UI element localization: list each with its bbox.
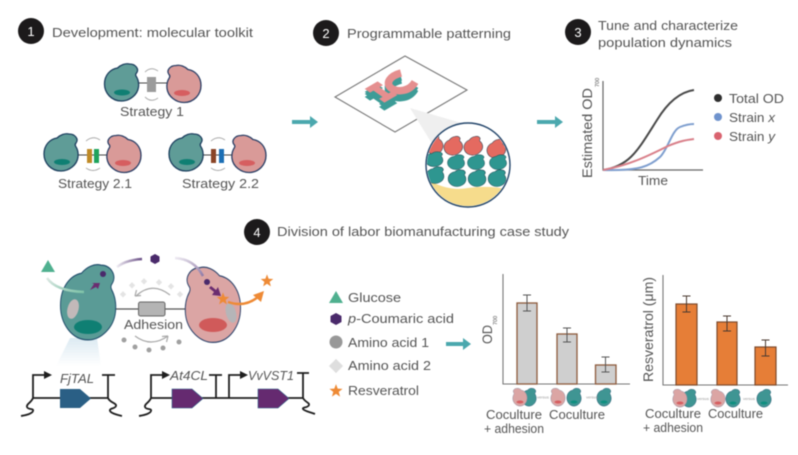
resveratrol axis label: Resveratrol (μm): [640, 277, 656, 382]
heading 1: 1: [27, 24, 35, 39]
line chart: Time: [638, 174, 668, 188]
strategy 1 diagram: [104, 64, 201, 119]
arrow: legend to charts: [446, 338, 471, 350]
p-coumaric acid icon: [150, 254, 160, 264]
strategy 2.2 diagram: Strategy 2.2: [182, 177, 259, 191]
strategy 2.2 diagram: [169, 134, 266, 191]
heading 3: 3: [574, 25, 582, 40]
genetic construct: At4CL and VvVST1: VvVST1: [248, 369, 294, 383]
panel 1: molecular toolkit: [18, 18, 266, 191]
patterned plate: [335, 56, 467, 132]
resveratrol condition icons: [673, 389, 771, 407]
resveratrol condition labels: Coculture: [645, 407, 701, 421]
genetic construct: At4CL and VvVST1: [139, 369, 315, 416]
resveratrol condition icons: versus: [697, 396, 709, 401]
export arc: [117, 259, 142, 267]
OD condition icons: versus: [586, 394, 598, 400]
heading 1: [18, 18, 254, 44]
chart legend: [714, 92, 784, 144]
OD axis label: 700: [493, 316, 499, 325]
OD condition labels: [484, 408, 605, 436]
expression beam: [56, 338, 101, 366]
bar chart: resveratrol: [640, 275, 788, 435]
resveratrol export arrow: [217, 274, 273, 304]
heading 3: Tune and characterize: [598, 19, 738, 33]
heading 2: [313, 20, 511, 46]
glucose uptake arrow: [47, 278, 84, 292]
resveratrol condition labels: Coculture: [708, 407, 763, 421]
strategy 2.1 diagram: Strategy 2.1: [58, 177, 132, 191]
genetic construct: FjTAL: [21, 371, 122, 416]
pink cell: [185, 267, 241, 342]
OD condition labels: Coculture: [549, 408, 605, 422]
heading 3: population dynamics: [598, 36, 732, 50]
strategy 2.1 diagram: [44, 134, 141, 191]
import arc: [175, 258, 203, 276]
OD bars: [517, 303, 616, 384]
genetic construct: FjTAL: FjTAL: [60, 372, 94, 386]
chart legend: Strain y: [729, 130, 776, 144]
magnified lens: [422, 123, 511, 212]
OD condition labels: + adhesion: [484, 422, 544, 436]
exchange arrows: [135, 288, 170, 342]
zoom wedge: [410, 108, 465, 142]
amino acid 2 diamonds: [120, 278, 183, 298]
amino acid 1 dots: [122, 338, 182, 352]
panel 4: coculture cell diagram: [41, 254, 273, 366]
OD condition icons: versus: [537, 394, 549, 400]
IC pattern: [365, 73, 415, 111]
panel 2: programmable patterning: [313, 20, 511, 212]
metabolite legend: p-Coumaric acid: [347, 312, 454, 326]
line chart: 700: [595, 78, 601, 87]
heading 2: 2: [322, 26, 330, 41]
metabolite legend: Amino acid 1: [348, 336, 429, 350]
OD axis label: OD: [479, 325, 495, 344]
glucose icon: [41, 260, 55, 272]
arrow: step 2 to 3: [537, 116, 563, 128]
resveratrol error bars: [682, 296, 770, 356]
resveratrol condition labels: + adhesion: [643, 421, 703, 435]
bar chart: OD700: [479, 274, 630, 436]
chart legend: Strain x: [729, 111, 776, 125]
heading 4: Division of labor biomanufacturing case study: [277, 225, 570, 239]
arrow: step 1 to 2: [292, 116, 318, 128]
OD axis label: [479, 316, 499, 344]
adhesion link: Adhesion: [124, 317, 183, 332]
metabolite legend: Resveratrol: [348, 384, 419, 398]
line chart: Estimated OD: [579, 88, 595, 178]
resveratrol condition labels: [643, 407, 763, 435]
panel 3: population dynamics: [565, 19, 784, 188]
adhesion link: [114, 302, 187, 332]
metabolite legend: [329, 291, 454, 398]
strategy 1 diagram: Strategy 1: [120, 105, 184, 119]
chart legend: Total OD: [729, 92, 784, 106]
OD error bars: [523, 295, 610, 372]
teal cell: [60, 265, 116, 340]
genetic construct: At4CL and VvVST1: At4CL: [169, 369, 208, 383]
heading 2: Programmable patterning: [347, 27, 511, 41]
line chart: [579, 78, 703, 188]
OD condition icons: [513, 388, 611, 406]
metabolite legend: Glucose: [348, 291, 401, 305]
heading 1: Development: molecular toolkit: [52, 26, 254, 40]
heading 3: [565, 19, 738, 50]
resveratrol bars: [676, 304, 776, 385]
heading 4: [244, 219, 570, 245]
heading 4: 4: [253, 225, 261, 240]
metabolite legend: Amino acid 2: [348, 359, 431, 373]
OD condition labels: Coculture: [486, 408, 542, 422]
resveratrol condition icons: versus: [743, 396, 755, 401]
